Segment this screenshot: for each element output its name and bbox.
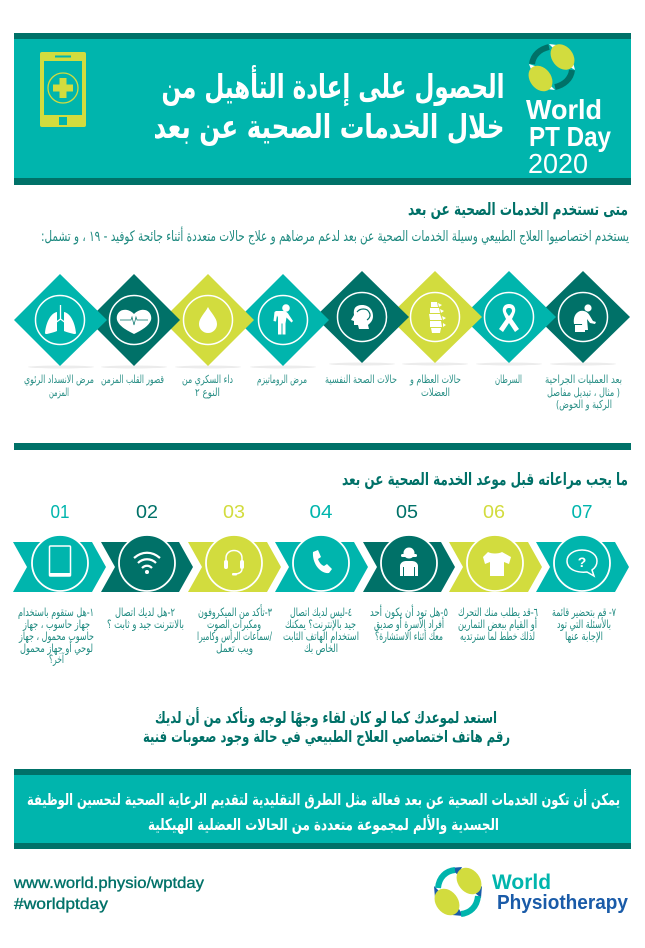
step 6 text [458,605,538,644]
step 3 text: /سماعات الرأس وكاميرا [197,628,272,644]
step numbers: 03 [223,502,245,522]
label: post surgery [545,373,622,411]
label: type 2 diabetes [182,373,233,399]
logo: World PT Day [524,40,611,179]
diamond row: conditions [14,271,630,368]
step 7 text: بالأسئلة التي تود [557,617,611,632]
closing note: استعد لموعدك كما لو كان لقاء وجهًا لوجه وتأكد من أن لديك [155,707,497,727]
step 7 text [552,605,616,643]
step 6 text: ٦-قد يطلب منك التحرك [458,605,538,620]
label: type 2 diabetes: داء السكري من [182,373,233,386]
step 4 text: الخاص بك [304,641,338,656]
step 1 text: آخر؟ [49,652,65,667]
closing note [143,707,510,747]
step numbers: 04 [310,502,332,522]
step 6 text: لذلك خطط لما سترتديه [460,629,535,644]
step 1: tablet [13,535,106,592]
label: musculoskeletal: حالات العظام و [409,373,461,386]
icon: diabetes drop [162,274,254,366]
step 1 text: حاسوب محمول ، جهاز [18,629,94,644]
label: COPD: المزمن [49,386,69,399]
step 6: t-shirt [449,535,542,592]
step 4 text: استخدام الهاتف الثابت [283,629,359,643]
icon: cancer ribbon [462,271,556,363]
logo: World Physiotherapy: World [492,871,551,894]
step 4 text [283,605,359,656]
bottom banner [14,769,631,849]
title [154,65,504,147]
icon: spine [388,271,482,363]
step 7: question bubble: ? [578,554,586,570]
step numbers: 05 [396,502,418,522]
icon: lungs [14,274,107,366]
step 3 text: ويب تعمل [216,641,253,656]
icon: rheumatism, stooped person [237,274,329,366]
step 3 text: ٣-تأكد من الميكروفون [198,604,272,620]
step 4: phone [275,535,368,592]
label: cancer: السرطان [495,373,522,386]
title: الحصول على إعادة التأهيل من [162,65,504,107]
logo: World Physiotherapy [429,863,629,920]
step 3 text: ومكبرات الصوت [207,617,261,632]
step 7 text: ٧- قم بتحضير قائمة [552,605,616,620]
step numbers: 02 [136,502,158,522]
step 3 text [197,604,272,656]
bottom banner: الجسدية والألم لمجموعة متعددة من الحالات العضلية الهيكلية [148,815,499,834]
step 1 text: جهاز حاسوب ، جهاز [22,617,90,632]
logo: World PT Day: PT Day [529,121,611,152]
header banner [14,33,631,185]
closing note: رقم هاتف اختصاصي العلاج الطبيعي في حالة وجود صعوبات فنية [143,727,510,747]
chevron row: steps [13,535,629,592]
step 5: person [363,535,455,592]
label: musculoskeletal [409,373,461,399]
step 7 text: الإجابة عنها [565,629,603,643]
logo: World PT Day: 2020 [528,148,588,179]
label: post surgery: ( مثال ، تبديل مفاصل [547,386,620,399]
step 5 text [370,604,448,644]
step 1 text: لوحي أو جهاز محمول [20,640,93,656]
step 5 text: ٥-هل تود أن يكون أحد [370,604,448,620]
label: musculoskeletal: العضلات [421,386,450,399]
step numbers: 07 [572,502,592,522]
label: COPD: مرض الانسداد الرئوي [24,373,94,386]
step 7: question bubble [536,535,629,592]
step numbers: 06 [483,502,505,522]
step 2 text: ٢-هل لديك اتصال [115,605,175,619]
label: COPD [24,373,94,399]
step 4 text: جيد بالإنترنت؟ يمكنك [285,617,356,632]
step 4 text: ٤-ليس لديك اتصال [290,605,352,620]
step 5 text: أفراد الأسرة أو صديق [374,616,444,632]
title: خلال الخدمات الصحية عن بعد [154,107,504,147]
logo: World PT Day: World [526,94,602,125]
label: post surgery: بعد العمليات الجراحية [545,373,622,386]
footer links [13,875,204,913]
step numbers: 01 [50,502,70,522]
icon: surgery, seated person [536,271,630,363]
step 2 text: بالانترنت جيد و ثابت ؟ [107,617,184,632]
label: post surgery: الركبة و الحوض) [556,398,612,411]
step 2: wifi [101,535,193,592]
step 3: headset [188,535,281,592]
label: type 2 diabetes: النوع ٢ [195,386,220,399]
step 2 text [107,605,184,632]
step numbers [50,502,592,522]
footer links: www.world.physio/wptday [13,875,204,892]
step 5 text: معك أثناء الاستشارة؟ [375,628,443,644]
label: heart failure: قصور القلب المزمن [101,373,164,386]
icon: phone with medical cross [40,52,86,127]
label: mental health: حالات الصحة النفسية [325,373,397,386]
logo: World Physiotherapy: Physiotherapy [497,892,629,914]
label: rheumatism: مرض الروماتيزم [257,373,307,386]
step 1 text: ١-هل ستقوم باستخدام [18,605,94,620]
icon: head with brain [315,271,409,363]
step 6 text: أو القيام ببعض التمارين [458,616,537,632]
icon: heart with pulse [88,274,180,366]
footer links: #worldptday [14,896,108,913]
step 1 text [18,605,94,667]
